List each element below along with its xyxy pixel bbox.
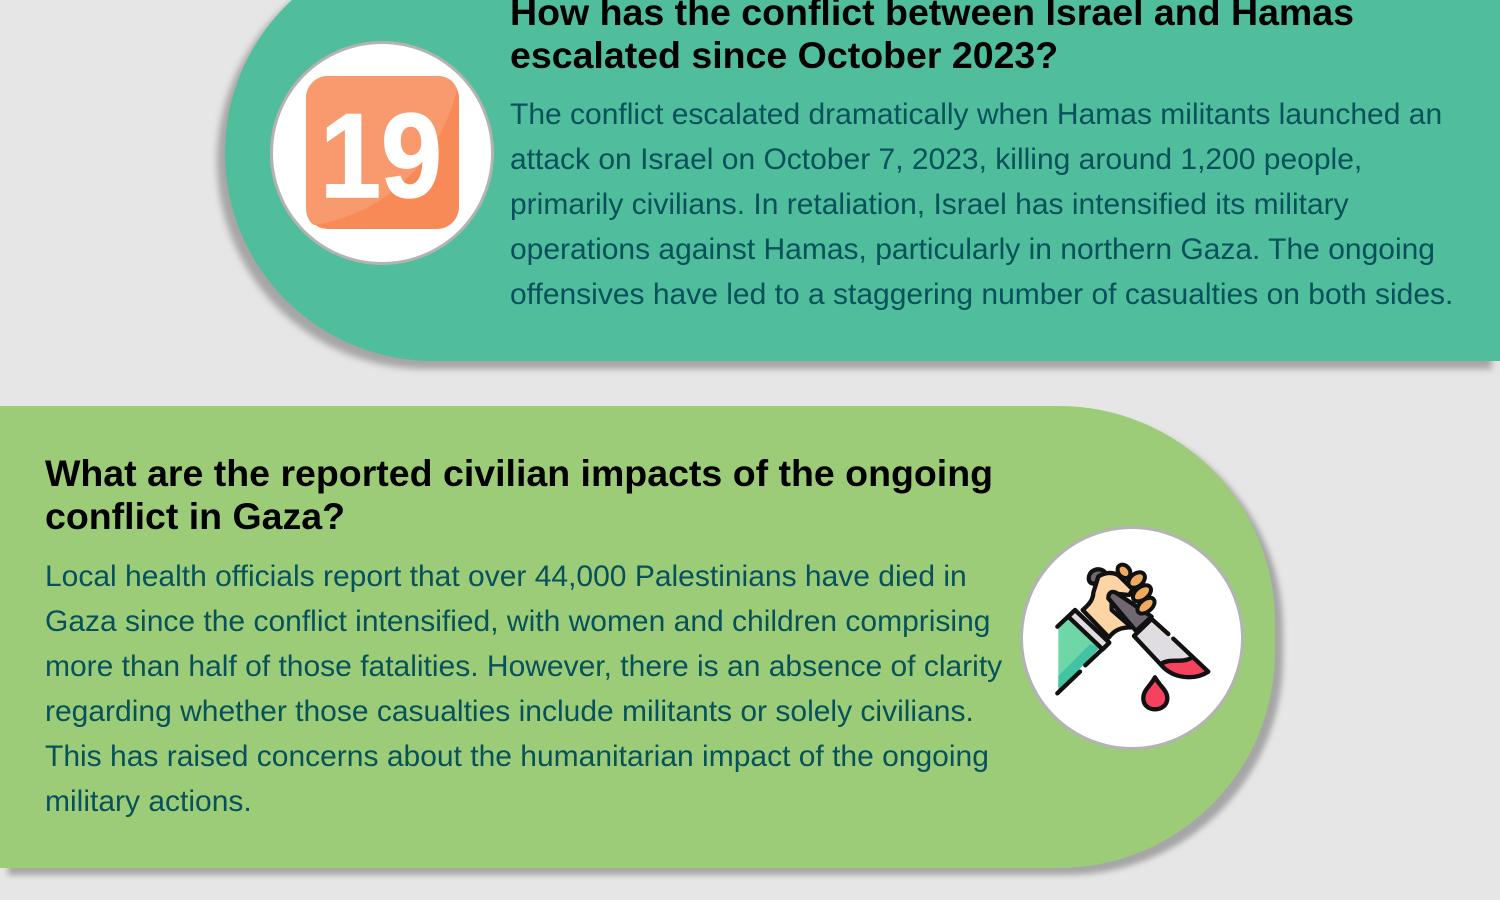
text: conflict escalation: The conflict escalated dramatically when Hamas militants launched an xyxy=(510,98,1442,131)
icon: number 19 badge: 19 xyxy=(320,89,442,223)
cuff xyxy=(1068,610,1109,649)
hand xyxy=(1083,573,1133,637)
text: conflict escalation: offensives have led to a staggering number of casualties on both sides. xyxy=(510,278,1453,311)
text: civilian impacts: regarding whether those casualties include militants or solely civilians. xyxy=(45,695,974,728)
heading: civilian impacts: What are the reported civilian impacts of the ongoing xyxy=(45,452,993,494)
knife blade xyxy=(1134,619,1208,677)
panel: conflict escalation xyxy=(225,0,1500,361)
text: civilian impacts: Local health officials report that over 44,000 Palestinians have died in xyxy=(45,560,967,593)
icon: number 19 badge xyxy=(270,41,494,265)
text: conflict escalation xyxy=(510,98,1453,311)
text: conflict escalation: operations against Hamas, particularly in northern Gaza. The ongoing xyxy=(510,233,1435,266)
text: conflict escalation: attack on Israel on October 7, 2023, killing around 1,200 people, xyxy=(510,143,1362,176)
fingers xyxy=(1115,562,1158,617)
blood drop xyxy=(1143,677,1167,709)
knife pommel xyxy=(1089,569,1106,584)
text: civilian impacts: more than half of those fatalities. However, there is an absence of clarity xyxy=(45,650,1002,683)
icon: hand holding bloody knife xyxy=(1020,526,1244,750)
text: conflict escalation: primarily civilians. In retaliation, Israel has intensified its military xyxy=(510,188,1349,221)
panel: civilian impacts xyxy=(0,406,1275,868)
heading: conflict escalation xyxy=(510,0,1354,76)
heading: conflict escalation: escalated since October 2023? xyxy=(510,34,1058,76)
blade outline xyxy=(1134,619,1208,677)
text: civilian impacts: Gaza since the conflict intensified, with women and children comprising xyxy=(45,605,990,638)
sleeve xyxy=(1057,612,1109,693)
heading: civilian impacts: conflict in Gaza? xyxy=(45,495,345,537)
text: civilian impacts xyxy=(45,560,1002,818)
text: civilian impacts: This has raised concerns about the humanitarian impact of the ongoing xyxy=(45,740,989,773)
text: civilian impacts: military actions. xyxy=(45,785,252,818)
blood on blade xyxy=(1161,657,1208,677)
knife handle xyxy=(1108,592,1152,631)
heading: civilian impacts xyxy=(45,452,993,537)
